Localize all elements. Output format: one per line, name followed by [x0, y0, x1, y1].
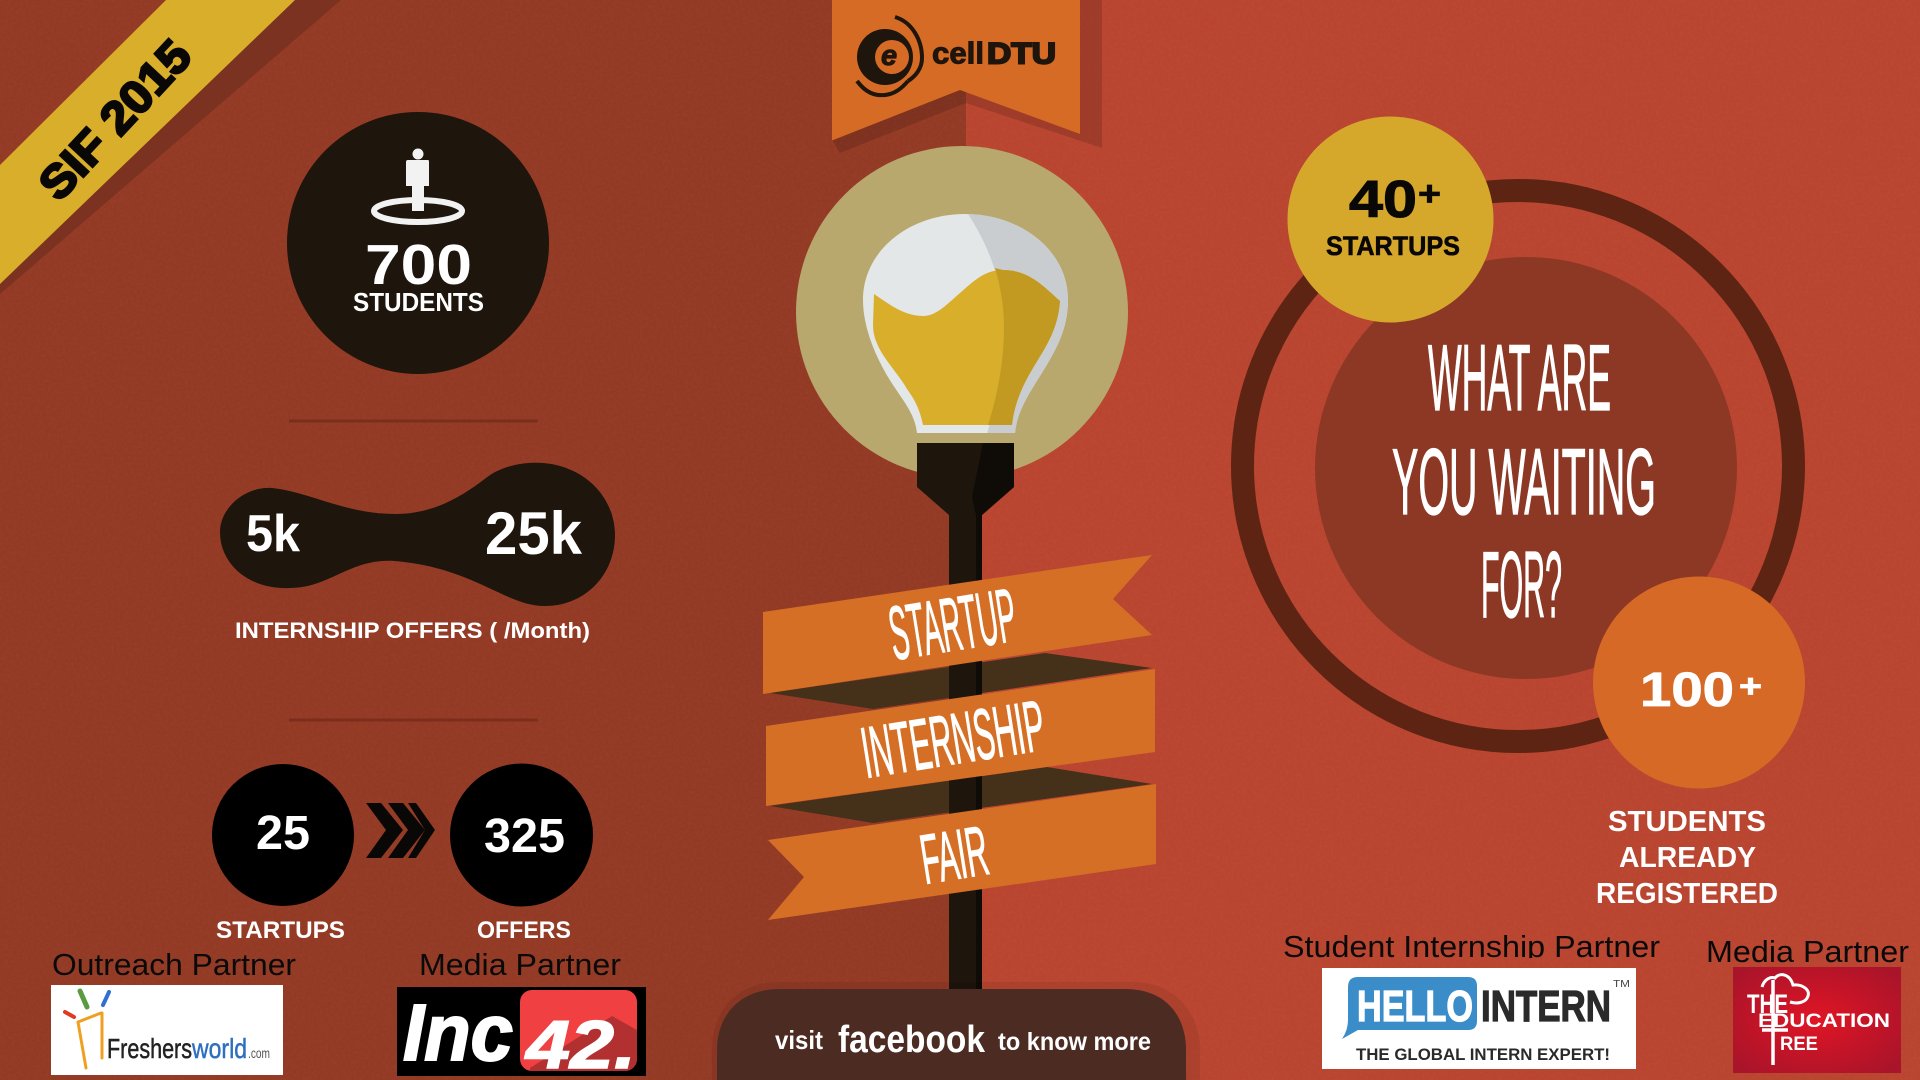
- illustration: lightbulb: [863, 214, 1068, 433]
- heading: media partner left: Media Partner: [419, 947, 621, 982]
- label: students already registered: [1596, 806, 1778, 910]
- banner: e-cell DTU bookmark: [832, 0, 1102, 153]
- value 25k: 25k: [485, 500, 583, 567]
- logo: the education tree: REE: [1780, 1034, 1818, 1055]
- ribbon: startup: [763, 555, 1152, 694]
- value 5k: 5k: [246, 505, 300, 563]
- chart: ring with call-out: WHAT ARE: [1428, 325, 1611, 430]
- logo: the education tree: THE: [1747, 989, 1788, 1019]
- badge: 40+ startups: +: [1418, 175, 1441, 213]
- ribbon: startup: STARTUP: [883, 573, 1022, 677]
- text: facebook: facebook: [838, 1019, 986, 1061]
- logo: the education tree: [1733, 967, 1901, 1073]
- logo: e-cell mark: [857, 17, 922, 95]
- label: students already registered: ALREADY: [1619, 842, 1756, 874]
- stat: 325 offers: [450, 764, 593, 906]
- ribbon folds: [770, 653, 1152, 823]
- illustration: signpost pole and socket: [917, 443, 1014, 989]
- logo: inc42: [397, 987, 646, 1080]
- ribbon: internship: [766, 669, 1155, 806]
- icon: person on ring: [374, 148, 462, 222]
- badge: 100+ students: +: [1739, 668, 1762, 704]
- label: students already registered: REGISTERED: [1596, 878, 1778, 910]
- heading: outreach partner: Outreach Partner: [52, 947, 296, 982]
- logo: hello intern: INTERN: [1481, 982, 1611, 1031]
- illustration: lightbulb glow: [796, 146, 1128, 478]
- badge: 40+ startups: [1288, 116, 1494, 322]
- logo: hello intern: TM: [1613, 979, 1630, 990]
- logo: inc42: Inc: [403, 988, 513, 1077]
- logo: DTU wordmark: DTU: [987, 38, 1056, 70]
- ribbon label: SIF 2015: [28, 30, 201, 210]
- badge: 100+ students: [1593, 576, 1805, 788]
- background: right half: [966, 0, 1920, 1080]
- headline: what are you waiting for: FOR?: [1481, 532, 1562, 637]
- logo: cell wordmark: cell: [932, 36, 984, 70]
- logo: freshersworld: world: [191, 1033, 247, 1064]
- ribbon: internship: INTERNSHIP: [856, 686, 1050, 794]
- badge: 100+ students: 100: [1640, 664, 1734, 717]
- label: internship offers: INTERNSHIP OFFERS ( /Month): [235, 618, 590, 643]
- stat: internship offers range: [220, 463, 615, 606]
- number 700: 700: [365, 233, 472, 297]
- label students: STUDENTS: [353, 287, 484, 317]
- label: students already registered: STUDENTS: [1608, 806, 1766, 838]
- logo: hello intern: HELLO: [1357, 982, 1473, 1031]
- badge: 40+ startups: STARTUPS: [1326, 231, 1460, 261]
- chart: ring with call-out: [1242, 116, 1805, 788]
- logo: freshersworld: [51, 985, 283, 1075]
- logo: the education tree: EDUCATION: [1758, 1011, 1890, 1032]
- stat: 25 startups: 25: [256, 807, 310, 860]
- stat: 25 startups: [212, 764, 354, 906]
- ribbon: fair: [768, 784, 1156, 920]
- logo: freshersworld: Freshers: [107, 1033, 192, 1064]
- label: startups: STARTUPS: [216, 917, 345, 944]
- logo: e-cell mark: e: [881, 40, 897, 72]
- heading: media partner right: Media Partner: [1706, 934, 1909, 969]
- stat: 700 students: [287, 112, 549, 374]
- headline: what are you waiting for: [1392, 325, 1656, 637]
- heading: student internship partner: Student Internship Partner: [1283, 929, 1660, 964]
- label: offers: OFFERS: [477, 917, 571, 944]
- text: visit: visit: [775, 1025, 823, 1055]
- background: left half: [0, 0, 966, 1080]
- panel: facebook call to action: [712, 982, 1200, 1080]
- ribbon: SIF 2015: [0, 0, 341, 294]
- text: to know more: to know more: [998, 1028, 1151, 1056]
- icon: triple chevron arrow: [366, 803, 435, 858]
- logo: hello intern: [1322, 968, 1636, 1069]
- stat: 325 offers: 325: [484, 810, 565, 863]
- badge: 40+ startups: 40: [1349, 171, 1417, 229]
- ribbon: fair: FAIR: [915, 811, 994, 899]
- logo: freshersworld: .com: [248, 1045, 270, 1061]
- logo: hello intern: THE GLOBAL INTERN EXPERT!: [1356, 1045, 1610, 1064]
